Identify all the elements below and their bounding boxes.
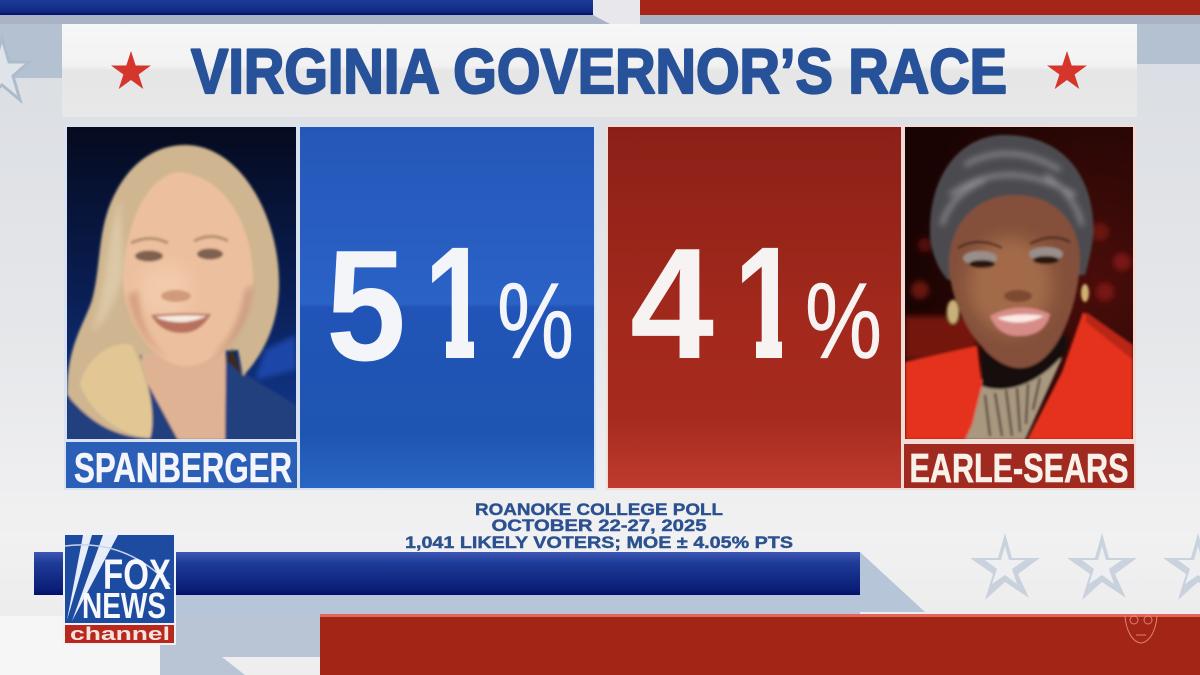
title: VIRGINIA GOVERNOR’S RACE [191, 37, 1007, 107]
poll source text: ROANOKE COLLEGE POLL [475, 501, 723, 519]
logo: Fox News Channel: channel [70, 624, 170, 644]
title panel [62, 24, 1137, 117]
face [949, 195, 1080, 368]
logo: Fox News Channel: NEWS [82, 585, 166, 626]
label: SPANBERGER: SPANBERGER [74, 444, 292, 491]
bottom blue bar [34, 552, 860, 595]
poll source text [405, 501, 793, 552]
icon: left red star [111, 51, 151, 89]
bottom red bar [320, 614, 1200, 675]
logo: Fox News Channel: FOX [103, 551, 171, 599]
hair back [67, 145, 279, 438]
panel: Spanberger [64, 125, 299, 491]
value: 51%: % [497, 260, 574, 381]
portrait: Spanberger [67, 127, 296, 440]
neck [140, 340, 226, 440]
logo: Fox News Channel [63, 533, 176, 645]
label: EARLE-SEARS: EARLE-SEARS [910, 445, 1128, 491]
value: 41%: 4 [630, 216, 714, 392]
panel: Spanberger result [298, 125, 596, 490]
icon: right red star [1047, 51, 1087, 89]
panel: Earle-Sears result [606, 125, 903, 490]
background star: left [0, 38, 29, 100]
jacket right [1027, 312, 1133, 440]
hair [930, 135, 1093, 280]
value: 51%: 1 [424, 213, 490, 392]
value: 51% [330, 248, 572, 362]
necklace [965, 358, 1062, 440]
nose [1004, 290, 1032, 302]
poll source text: 1,041 LIKELY VOTERS; MOE ± 4.05% PTS [405, 534, 793, 552]
top red bar [640, 0, 1200, 15]
value: 51%: 5 [326, 218, 406, 394]
poll source text: OCTOBER 22-27, 2025 [492, 517, 706, 535]
portrait: Earle-Sears [905, 127, 1133, 440]
mouth [151, 313, 211, 333]
face [123, 172, 253, 366]
blazer [67, 360, 296, 440]
nose [161, 290, 191, 302]
background stars: right [970, 533, 1200, 600]
jacket left [905, 346, 982, 440]
turtleneck [982, 335, 1067, 389]
brows and eyes [131, 236, 228, 243]
panel: Earle-Sears [903, 125, 1136, 491]
value: 41%: 1 [734, 213, 800, 392]
value: 41%: % [805, 260, 882, 381]
icon: watermark face [1125, 616, 1157, 643]
earrings [947, 300, 959, 324]
mouth [990, 307, 1050, 336]
top blue bar [0, 0, 593, 15]
value: 41% [632, 248, 880, 359]
eyes and brows [958, 237, 1070, 248]
